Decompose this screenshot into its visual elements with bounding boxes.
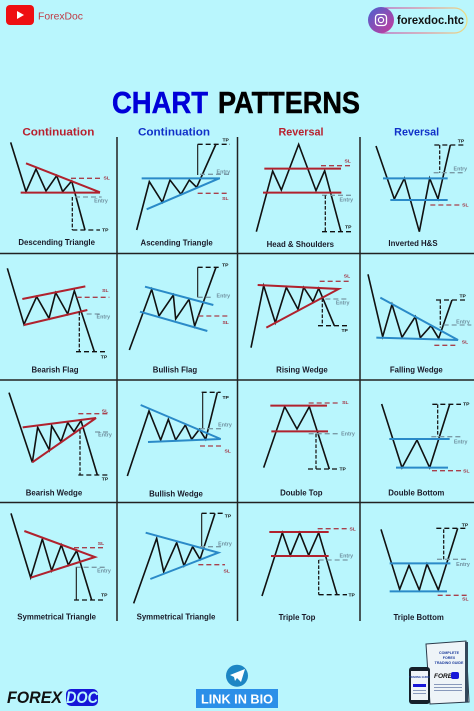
instagram badge xyxy=(368,7,467,33)
panel: descending triangle xyxy=(11,142,110,247)
panel: triple top: Entry xyxy=(340,553,353,559)
panel: rising wedge: SL xyxy=(344,273,350,279)
panel: bearish flag: Entry xyxy=(97,314,110,320)
panel: triple top xyxy=(262,526,356,622)
panel: double top: Entry xyxy=(341,431,355,437)
panel: bullish wedge: SL xyxy=(224,448,231,454)
panel: inverted head and shoulders xyxy=(376,139,469,248)
panel: descending triangle: Descending Triangle xyxy=(18,238,96,247)
panel: falling wedge: SL xyxy=(462,339,468,345)
panel: symmetrical triangle bullish: Entry xyxy=(218,541,232,547)
book: TRADING GUIDE xyxy=(435,661,464,665)
column headers: Reversal xyxy=(394,127,439,139)
panel: head and shoulders: Head & Shoulders xyxy=(267,240,335,249)
panel: triple top: SL xyxy=(349,526,356,532)
panel: head and shoulders xyxy=(256,144,353,249)
forexdoc logo: DOC xyxy=(66,688,99,707)
column headers: Continuation xyxy=(138,127,210,139)
panel: bullish wedge: Bullish Wedge xyxy=(149,489,204,498)
panel: symmetrical triangle bullish: TP xyxy=(225,514,232,520)
panel: bearish flag: Bearish Flag xyxy=(32,366,79,375)
panel: triple bottom: Triple Bottom xyxy=(393,613,444,622)
forexdoc logo: FOREX xyxy=(7,688,64,707)
panel: triple bottom: SL xyxy=(462,597,469,603)
panel: double bottom: TP xyxy=(463,401,470,407)
panel: symmetrical triangle bearish: SL xyxy=(98,541,104,547)
title: CHART xyxy=(112,85,208,120)
book: FOREX xyxy=(434,673,457,680)
panel: bearish flag: TP xyxy=(101,354,108,360)
panel: double bottom: SL xyxy=(463,468,470,474)
panel: inverted head and shoulders: TP xyxy=(458,139,465,145)
panel: falling wedge: Entry xyxy=(456,319,470,325)
panel: double bottom xyxy=(382,401,470,497)
panel: rising wedge: Entry xyxy=(336,300,350,306)
panel: bullish flag: Entry xyxy=(217,293,230,299)
panel: descending triangle: SL xyxy=(103,175,110,181)
panel: triple bottom: Entry xyxy=(456,562,470,568)
panel: ascending triangle: Ascending Triangle xyxy=(141,238,213,247)
forexdoc logo xyxy=(7,688,99,707)
panel: double top: SL xyxy=(342,400,349,406)
panel: symmetrical triangle bearish xyxy=(11,513,111,621)
panel: bullish wedge: Entry xyxy=(218,423,232,429)
panel: bearish flag xyxy=(7,268,110,375)
icon: youtube xyxy=(6,5,34,25)
column headers: Reversal xyxy=(278,127,323,139)
panel: bullish wedge xyxy=(127,392,232,498)
link in bio button: LINK IN BIO xyxy=(201,692,273,706)
panel: bullish flag: SL xyxy=(222,320,229,326)
panel: bearish flag: SL xyxy=(102,288,109,294)
panel: descending triangle: Entry xyxy=(94,198,108,204)
phone: TRADING GUIDE xyxy=(409,675,430,679)
title: PATTERNS xyxy=(218,85,360,120)
panel: bearish wedge xyxy=(9,393,112,498)
panel: bearish wedge: SL xyxy=(102,408,108,414)
panel: double top: TP xyxy=(339,467,347,473)
youtube badge xyxy=(6,5,83,25)
panel: descending triangle: TP xyxy=(102,228,109,234)
panel: double top xyxy=(264,400,355,497)
panel: double bottom: Entry xyxy=(454,440,468,446)
panel: symmetrical triangle bullish xyxy=(134,513,232,621)
panel: bearish wedge: Entry xyxy=(98,433,112,439)
panel: double bottom: Double Bottom xyxy=(388,488,444,497)
panel: bearish wedge: Bearish Wedge xyxy=(26,489,83,498)
panel: symmetrical triangle bearish: Symmetrical Triangle xyxy=(17,612,97,621)
panel: ascending triangle xyxy=(137,138,230,247)
panel: inverted head and shoulders: SL xyxy=(462,203,469,209)
column headers: Continuation xyxy=(22,127,94,139)
panel: head and shoulders: Entry xyxy=(340,198,353,204)
panel: rising wedge: TP xyxy=(341,328,349,334)
panel: falling wedge: Falling Wedge xyxy=(390,366,443,375)
panel: inverted head and shoulders: Entry xyxy=(454,166,467,172)
panel: ascending triangle: SL xyxy=(222,196,229,202)
panel: bearish wedge: TP xyxy=(102,476,109,482)
panel: symmetrical triangle bearish: Entry xyxy=(97,569,111,575)
panel: falling wedge: TP xyxy=(459,293,467,299)
panel: symmetrical triangle bullish: SL xyxy=(223,568,230,574)
panel: symmetrical triangle bearish: TP xyxy=(101,592,108,598)
column headers xyxy=(22,127,439,139)
panel: triple bottom xyxy=(381,522,470,622)
panel: triple top: Triple Top xyxy=(279,613,316,622)
panel: bullish flag: Bullish Flag xyxy=(153,366,197,375)
icon: telegram xyxy=(226,665,248,687)
panel: triple bottom: TP xyxy=(462,522,469,528)
panel: bullish flag xyxy=(129,263,230,375)
panel: rising wedge: Rising Wedge xyxy=(276,366,328,375)
book xyxy=(426,641,469,704)
panel: head and shoulders: TP xyxy=(345,224,352,230)
panel: ascending triangle: Entry xyxy=(217,169,230,175)
panel: bullish flag: TP xyxy=(222,263,229,269)
panel: head and shoulders: SL xyxy=(344,159,351,165)
title xyxy=(112,85,360,120)
panel: double top: Double Top xyxy=(280,488,323,497)
youtube channel name: ForexDoc xyxy=(38,12,83,22)
panel: rising wedge xyxy=(251,273,350,375)
panel: bullish wedge: TP xyxy=(222,395,230,401)
book: FOREX xyxy=(443,656,456,660)
icon: instagram xyxy=(368,7,394,33)
book: COMPLETE xyxy=(439,651,460,655)
panel: ascending triangle: TP xyxy=(222,138,230,144)
panel: triple top: TP xyxy=(348,592,356,598)
instagram handle: forexdoc.htc xyxy=(397,15,465,27)
panel: inverted head and shoulders: Inverted H&S xyxy=(388,239,438,248)
panel: symmetrical triangle bullish: Symmetrical Triangle xyxy=(137,612,216,621)
panel: falling wedge xyxy=(368,274,471,375)
book and phone mockup xyxy=(409,641,469,704)
